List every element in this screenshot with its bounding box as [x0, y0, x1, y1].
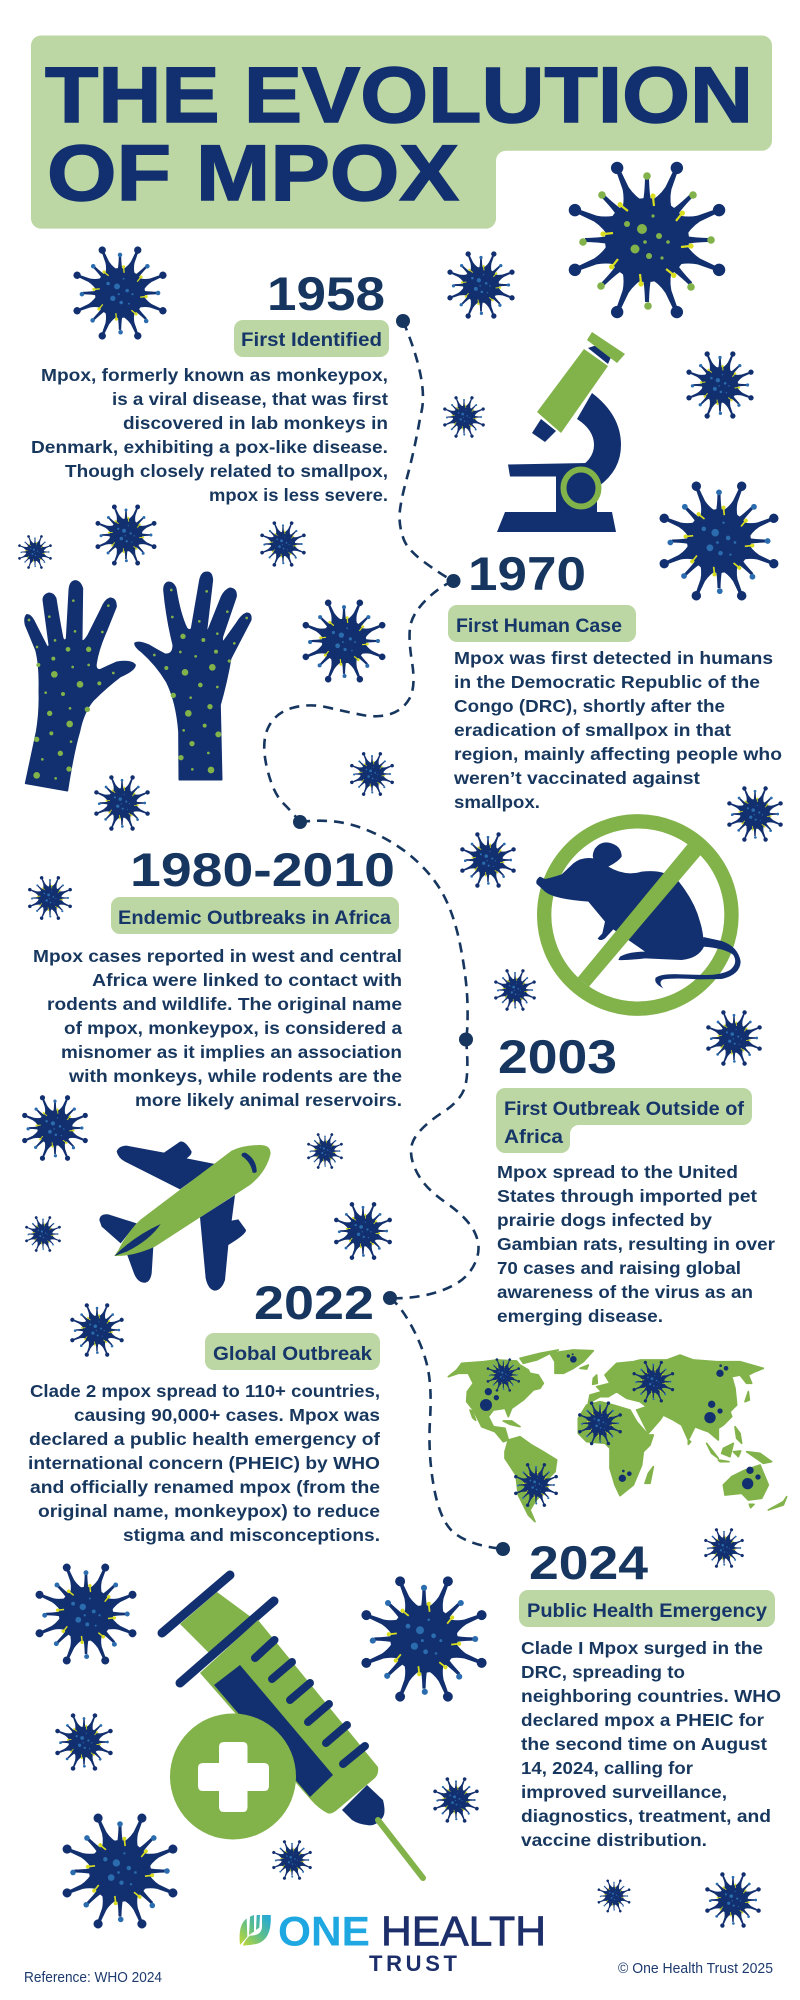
icon: syringe	[162, 1575, 423, 1878]
label: First Identified	[234, 320, 389, 357]
label: Public Health Emergency	[519, 1590, 775, 1627]
year: 1980-2010: 1980-2010	[130, 843, 395, 896]
label: Global Outbreak	[205, 1333, 380, 1370]
text block: 1958 description: mpox is less severe.	[209, 485, 388, 505]
text block: 2022 description: Clade 2 mpox spread to 110+ countries,	[30, 1381, 380, 1401]
title panel	[31, 36, 772, 229]
reference note: Reference: WHO 2024	[24, 1970, 162, 1986]
logo wordmark: HEALTH	[381, 1908, 546, 1954]
text block: 1980-2010 description: misnomer as it implies an association	[61, 1042, 402, 1062]
text block: 2024 description: neighboring countries. WHO	[521, 1686, 781, 1706]
copyright note: © One Health Trust 2025	[618, 1961, 773, 1977]
title	[45, 50, 753, 217]
text block: 2003 description: Gambian rats, resulting in over	[497, 1234, 775, 1254]
text block: 1958 description: Denmark, exhibiting a pox-like disease.	[31, 437, 388, 457]
logo wordmark: ONE	[278, 1908, 370, 1954]
text block: 1958 description: Though closely related to smallpox,	[65, 461, 388, 481]
label: First Outbreak Outside of Africa: Africa	[504, 1126, 563, 1148]
section: 1970	[448, 547, 782, 812]
year: 1970: 1970	[468, 547, 586, 600]
timeline dashed path	[264, 321, 503, 1549]
text block: 1970 description: eradication of smallpox in that	[454, 720, 731, 740]
text block: 1980-2010 description	[33, 946, 402, 1110]
text block: 2022 description	[28, 1381, 380, 1545]
section: 2003	[496, 1030, 775, 1326]
logo wordmark	[278, 1908, 546, 1976]
icon: rat with prohibition sign	[536, 821, 741, 1009]
text block: 2024 description: DRC, spreading to	[521, 1662, 685, 1682]
text block: 2003 description: emerging disease.	[497, 1306, 663, 1326]
title: THE EVOLUTION	[45, 50, 753, 139]
text block: 2024 description	[521, 1638, 781, 1850]
section: 1980-2010	[33, 843, 402, 1110]
icon: airplane	[99, 1141, 271, 1291]
timeline nodes	[293, 314, 510, 1556]
text block: 2022 description: causing 90,000+ cases. Mpox was	[74, 1405, 380, 1425]
label: First Outbreak Outside of Africa	[496, 1088, 752, 1153]
text block: 1970 description: Congo (DRC), shortly after the	[454, 696, 725, 716]
text block: 2024 description: 14, 2024, calling for	[521, 1758, 693, 1778]
year: 1958: 1958	[267, 267, 385, 320]
label: Public Health Emergency: Public Health Emergency	[527, 1600, 767, 1622]
logo: One Health Trust	[240, 1908, 546, 1976]
text block: 1958 description: is a viral disease, that was first	[112, 389, 388, 409]
text block: 1958 description: Mpox, formerly known as monkeypox,	[41, 365, 388, 385]
title: OF MPOX	[47, 128, 459, 217]
text block: 2024 description: diagnostics, treatment, and	[521, 1806, 771, 1826]
label: First Human Case: First Human Case	[456, 615, 622, 637]
text block: 1970 description: region, mainly affecting people who	[454, 744, 782, 764]
text block: 2024 description: declared mpox a PHEIC for	[521, 1710, 764, 1730]
icon: hands	[25, 572, 251, 791]
section: 1958	[31, 267, 389, 505]
text block: 1970 description: weren’t vaccinated against	[453, 768, 700, 788]
text block: 2024 description: the second time on August	[521, 1734, 767, 1754]
text block: 2003 description: awareness of the virus as an	[497, 1282, 753, 1302]
label: First Human Case	[448, 605, 636, 642]
text block: 2003 description: prairie dogs infected by	[497, 1210, 712, 1230]
label: First Identified: First Identified	[241, 329, 382, 351]
text block: 2022 description: and officially renamed mpox (from the	[30, 1477, 380, 1497]
label: Endemic Outbreaks in Africa: Endemic Outbreaks in Africa	[118, 907, 391, 929]
text block: 2022 description: stigma and misconceptions.	[123, 1525, 380, 1545]
section: 2022	[28, 1276, 380, 1545]
text block: 2024 description: improved surveillance,	[521, 1782, 727, 1802]
text block: 2003 description: States through imported pet	[497, 1186, 757, 1206]
icon: microscope	[497, 332, 625, 532]
icon: world map	[448, 1350, 787, 1522]
text block: 2022 description: international concern (PHEIC) by WHO	[28, 1453, 380, 1473]
text block: 1980-2010 description: with monkeys, while rodents are the	[68, 1066, 402, 1086]
text block: 2024 description: vaccine distribution.	[521, 1830, 707, 1850]
label: Global Outbreak: Global Outbreak	[213, 1343, 372, 1365]
text block: 1970 description: in the Democratic Republic of the	[454, 672, 760, 692]
text block: 1980-2010 description: Mpox cases reported in west and central	[33, 946, 402, 966]
text block: 1970 description: smallpox.	[454, 792, 540, 812]
text block: 2022 description: declared a public health emergency of	[29, 1429, 380, 1449]
year: 2022: 2022	[254, 1276, 374, 1329]
text block: 2003 description: 70 cases and raising global	[497, 1258, 741, 1278]
icon: large virus top right	[564, 157, 730, 323]
text block: 1980-2010 description: Africa were linked to contact with	[92, 970, 402, 990]
icon: logo leaf	[240, 1915, 271, 1946]
text block: 2003 description: Mpox spread to the United	[497, 1162, 738, 1182]
section: 2024	[519, 1536, 781, 1850]
text block: 1980-2010 description: rodents and wildlife. The original name	[47, 994, 402, 1014]
text block: 2003 description	[497, 1162, 775, 1326]
text block: 1958 description	[31, 365, 388, 505]
year: 2024: 2024	[529, 1536, 648, 1589]
text block: 1970 description	[453, 648, 782, 812]
text block: 1958 description: discovered in lab monkeys in	[123, 413, 388, 433]
label: First Outbreak Outside of Africa: First Outbreak Outside of	[504, 1098, 745, 1120]
text block: 2024 description: Clade I Mpox surged in the	[521, 1638, 763, 1658]
year: 2003: 2003	[498, 1030, 617, 1083]
text block: 2022 description: original name, monkeypox) to reduce	[38, 1501, 380, 1521]
text block: 1980-2010 description: more likely animal reservoirs.	[135, 1090, 402, 1110]
logo wordmark: TRUST	[369, 1951, 458, 1976]
text block: 1970 description: Mpox was first detected in humans	[454, 648, 773, 668]
label: Endemic Outbreaks in Africa	[111, 897, 399, 934]
text block: 1980-2010 description: of mpox, monkeypox, is considered a	[64, 1018, 402, 1038]
